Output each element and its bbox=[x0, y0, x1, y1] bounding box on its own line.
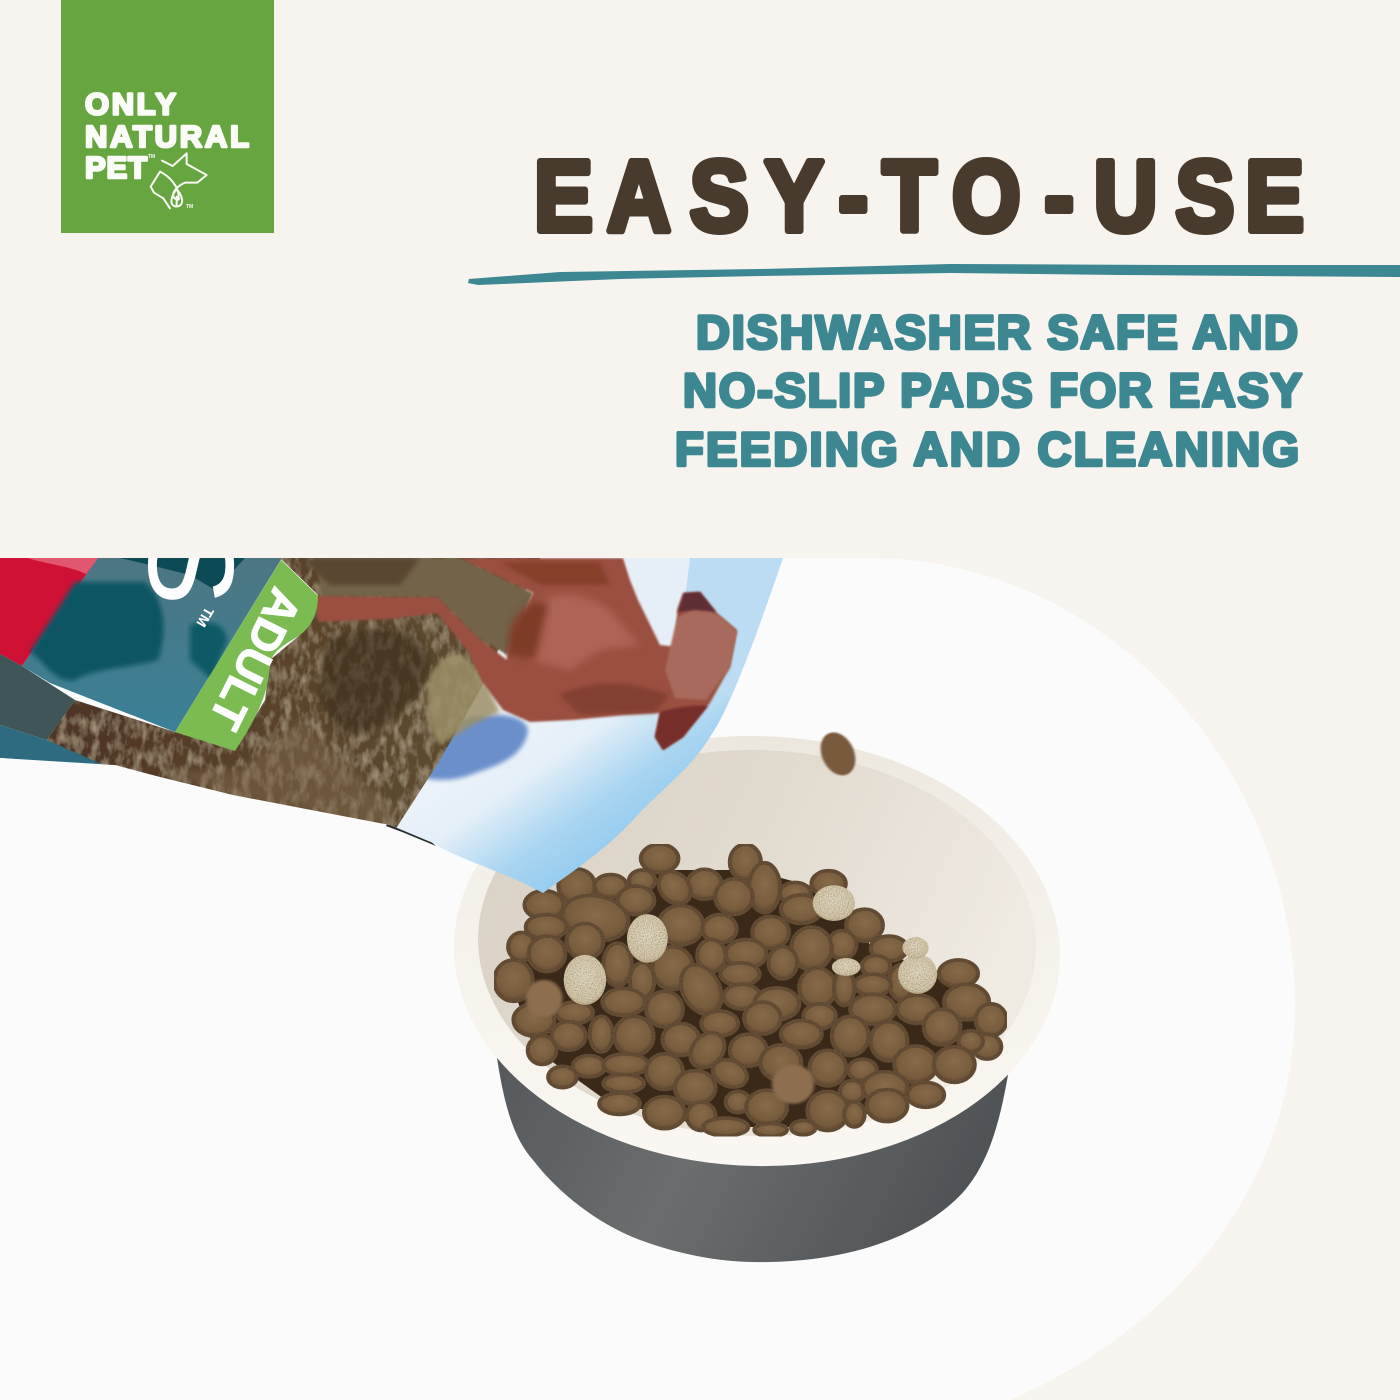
logo: Only Natural Pet: NATURAL bbox=[85, 119, 249, 154]
bag dark panel bbox=[0, 654, 75, 740]
olive fur behind dog bbox=[315, 558, 533, 655]
logo: Only Natural Pet: PET bbox=[85, 150, 147, 185]
ADULT label: ADULT bbox=[199, 581, 312, 738]
logo: Only Natural Pet: TM bbox=[186, 204, 193, 210]
subheading text: DISHWASHER SAFE AND bbox=[696, 306, 1298, 358]
teal dark reflection bbox=[30, 582, 164, 681]
bowl bbox=[448, 728, 1066, 1262]
bag teal panel bbox=[22, 558, 282, 732]
cloud bbox=[413, 715, 528, 780]
dog nose bbox=[678, 592, 716, 612]
icon: dog, cat and leaf outline bbox=[151, 153, 207, 208]
dog ear bbox=[655, 706, 708, 750]
subheading text: NO-SLIP PADS FOR EASY bbox=[683, 364, 1302, 416]
bag dark back corner bbox=[386, 810, 436, 846]
fur lighter lower edge bbox=[180, 723, 394, 825]
bag letter S: S bbox=[123, 524, 259, 605]
red dog bbox=[316, 558, 737, 750]
bag red panel bbox=[0, 558, 98, 666]
bag dog fur bbox=[47, 558, 540, 830]
logo: Only Natural Pet: ONLY bbox=[85, 86, 176, 122]
logo: Only Natural Pet bbox=[61, 0, 274, 233]
kibble pile bbox=[494, 728, 1007, 1136]
dog head bbox=[665, 605, 737, 700]
light kibbles bbox=[564, 885, 937, 1005]
fur dark centre bbox=[320, 628, 430, 735]
subheading text bbox=[675, 306, 1302, 476]
white curved backdrop panel bbox=[0, 558, 1295, 1400]
brush stroke underline bbox=[468, 264, 1400, 285]
upper sky bbox=[686, 558, 783, 700]
golden fur tips bbox=[427, 655, 500, 745]
subheading text: FEEDING AND CLEANING bbox=[675, 422, 1299, 476]
logo: Only Natural Pet: TM bbox=[148, 154, 155, 160]
pouring food bag bbox=[0, 558, 783, 893]
bag green ADULT badge bbox=[175, 560, 318, 751]
bowl inner wall bbox=[473, 743, 1041, 1143]
bag nutrition text panel bbox=[0, 725, 115, 766]
bowl cream rim bbox=[448, 728, 1066, 1174]
bowl dark outer base bbox=[497, 1058, 1008, 1262]
heading: EASY-TO-USE bbox=[534, 140, 1304, 252]
falling kibble above rim bbox=[815, 728, 861, 779]
bag sky background bbox=[388, 558, 760, 893]
motion-blurred falling kibbles bbox=[526, 980, 814, 1104]
trademark: TM bbox=[193, 604, 217, 630]
dog shoulder shading bbox=[533, 594, 637, 670]
